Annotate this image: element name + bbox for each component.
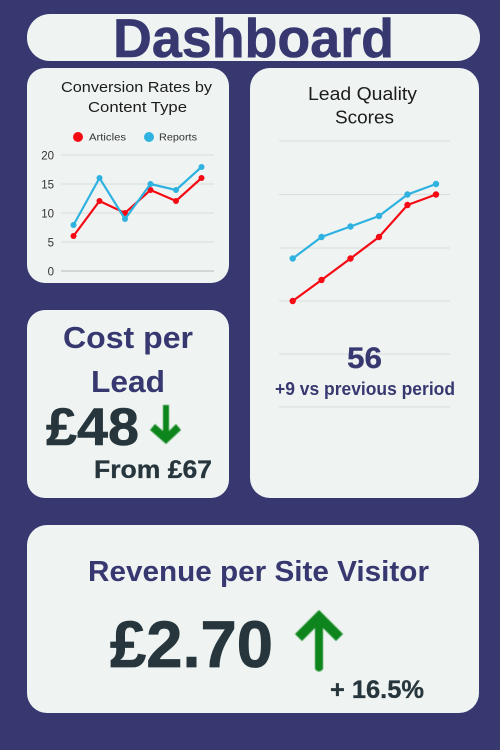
revenue value: £2.70 bbox=[110, 607, 273, 681]
icon: down arrow bbox=[150, 405, 181, 444]
heading: cost per lead bbox=[63, 320, 193, 399]
heading: revenue: Revenue per Site Visitor bbox=[88, 556, 429, 588]
heading: conversion rates bbox=[61, 79, 213, 116]
legend: Articles bbox=[89, 132, 126, 144]
cost value: £48 bbox=[46, 398, 139, 457]
icon: up arrow bbox=[295, 610, 343, 672]
line chart: lead quality bbox=[279, 141, 450, 407]
lead score change: +9 vs previous period bbox=[275, 379, 455, 399]
line chart: conversion rates: 0 bbox=[48, 266, 54, 278]
legend bbox=[73, 132, 197, 144]
revenue change: + 16.5% bbox=[330, 676, 424, 704]
legend: Reports bbox=[159, 132, 197, 144]
panel: cost per lead bbox=[27, 310, 229, 498]
heading: conversion rates: Content Type bbox=[88, 99, 187, 116]
heading: cost per lead: Cost per bbox=[63, 320, 193, 355]
panel: lead quality scores bbox=[250, 68, 479, 498]
title panel bbox=[27, 7, 480, 69]
heading: conversion rates: Conversion Rates by bbox=[61, 79, 213, 96]
title: Dashboard bbox=[113, 7, 394, 69]
lead score value: 56 bbox=[347, 342, 382, 375]
line chart: conversion rates bbox=[41, 150, 214, 278]
previous cost: From £67 bbox=[94, 456, 212, 484]
line chart: conversion rates: 5 bbox=[48, 238, 54, 250]
panel: revenue per site visitor bbox=[27, 525, 479, 713]
heading: lead quality: Lead Quality bbox=[308, 84, 417, 104]
heading: cost per lead: Lead bbox=[91, 364, 165, 399]
panel: conversion rates bbox=[27, 68, 229, 283]
heading: lead quality bbox=[308, 84, 417, 128]
line chart: conversion rates: 10 bbox=[41, 208, 54, 220]
line chart: conversion rates: 20 bbox=[41, 150, 54, 162]
line chart: conversion rates: 15 bbox=[41, 180, 54, 192]
heading: lead quality: Scores bbox=[335, 108, 394, 128]
